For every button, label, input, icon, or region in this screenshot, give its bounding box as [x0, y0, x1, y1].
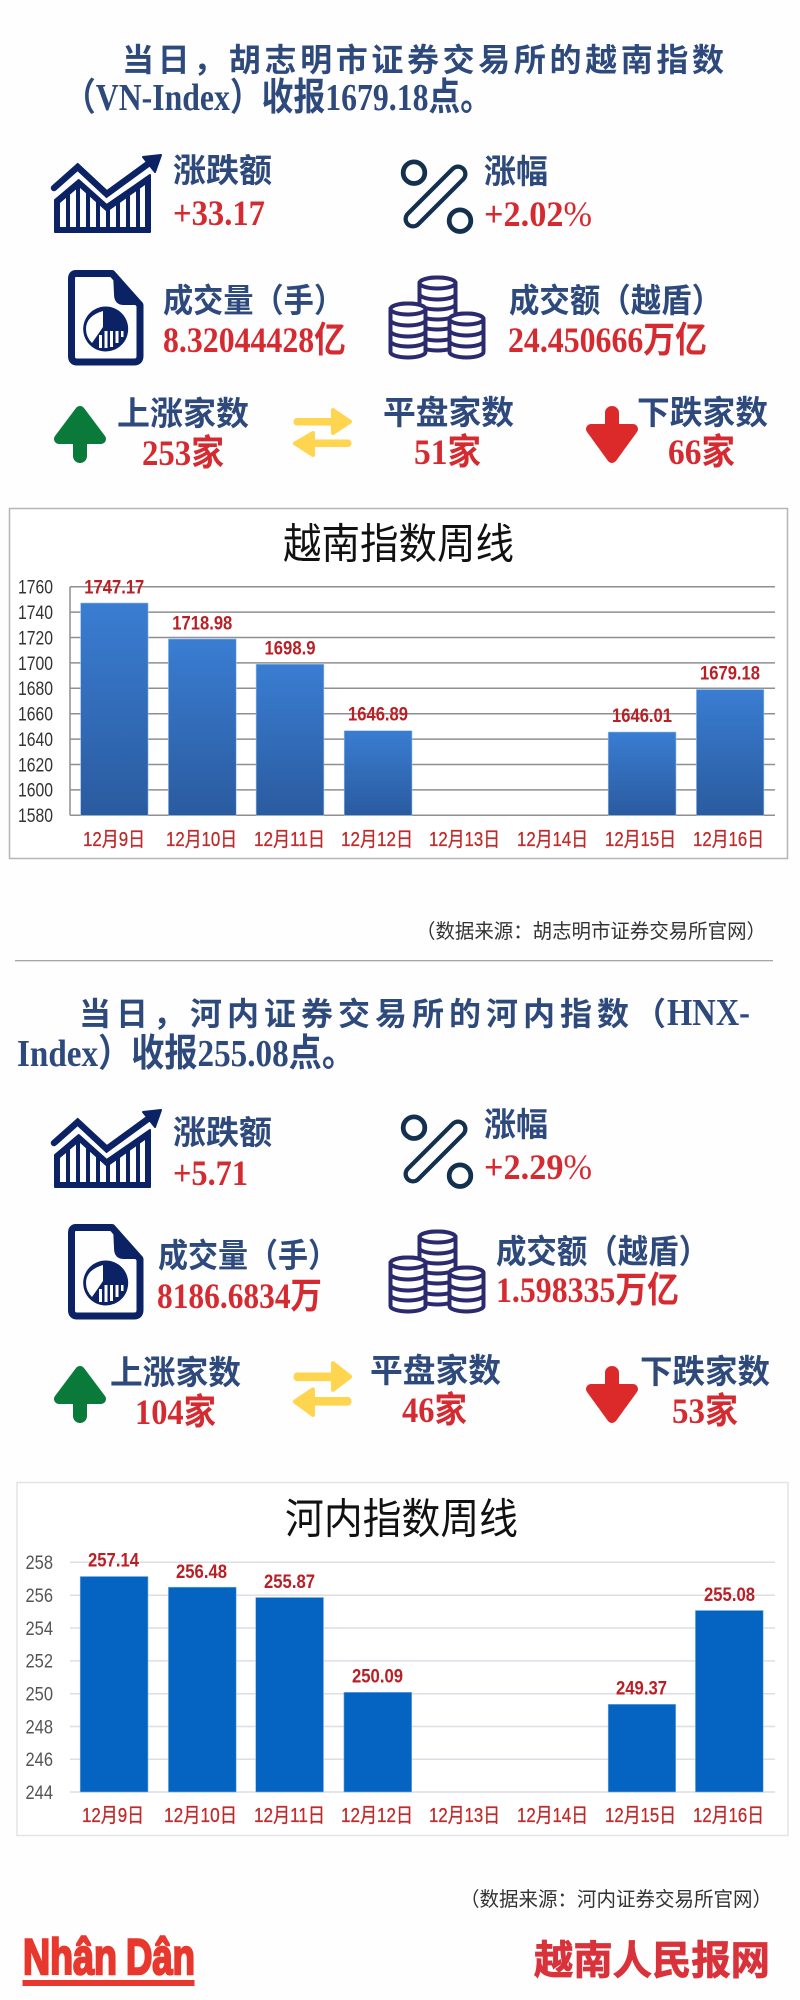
- icon: coins: [390, 1232, 484, 1312]
- y axis labels: 254: [26, 1619, 53, 1640]
- y axis labels: 250: [26, 1684, 53, 1706]
- x axis labels: 12月12日: [341, 1805, 413, 1827]
- stat: change amount: 涨跌额: [173, 1106, 272, 1154]
- x axis labels: 12月9日: [83, 829, 145, 851]
- heading: HNX-Index close: [17, 992, 750, 1075]
- y axis labels: 1760: [18, 578, 53, 598]
- y axis labels: 252: [26, 1652, 53, 1672]
- icon: coins: [390, 278, 484, 358]
- stat: volume: 8.32044428亿: [163, 320, 346, 360]
- stat: gainers: [110, 1346, 241, 1432]
- x axis labels: 12月11日: [254, 1805, 325, 1827]
- stat: gainers: 上涨家数: [117, 387, 249, 435]
- x axis labels: 12月14日: [517, 829, 588, 851]
- stat: losers: [637, 386, 768, 472]
- stat: change amount: [173, 1106, 272, 1193]
- logo: Nhan Dan: Dân: [126, 1929, 195, 1985]
- logo: Nhan Dan: Nhân: [23, 1929, 117, 1985]
- heading: VN-Index close: 当日，胡志明市证券交易所的越南指数: [122, 42, 724, 78]
- data labels: 255.87: [264, 1572, 315, 1593]
- stat: gainers: 104家: [135, 1392, 216, 1432]
- heading: VN-Index close: [64, 42, 724, 119]
- stat: change percent: 涨幅: [484, 1098, 548, 1146]
- stat: turnover: [496, 1225, 709, 1310]
- section: HNX-Index summary: [17, 992, 770, 1432]
- stat: change amount: +5.71: [173, 1153, 248, 1193]
- x axis labels: 12月14日: [517, 1805, 588, 1827]
- icon: swap arrows: [295, 410, 350, 455]
- stat: gainers: 253家: [142, 433, 224, 473]
- y axis labels: [18, 578, 53, 827]
- x axis labels: 12月11日: [254, 829, 325, 851]
- stat: losers: [640, 1345, 770, 1431]
- data labels: 255.08: [704, 1585, 755, 1606]
- heading: HNX-Index close: （: [634, 996, 666, 1032]
- stat: change percent: [484, 1098, 592, 1187]
- y axis labels: 1740: [18, 603, 53, 624]
- y axis labels: 256: [26, 1586, 53, 1607]
- stat: change amount: [173, 144, 272, 233]
- source note: VN-Index: （数据来源：胡志明市证券交易所官网）: [416, 920, 766, 943]
- stat: losers: 66家: [668, 432, 735, 472]
- data labels: 257.14: [88, 1550, 139, 1572]
- icon: rising chart: [54, 155, 161, 232]
- y axis labels: 1720: [18, 628, 53, 650]
- stat: volume: 8186.6834万: [157, 1276, 322, 1316]
- data labels: 1679.18: [700, 664, 760, 684]
- icon: up arrow: [59, 1371, 101, 1422]
- stat: losers: 53家: [672, 1391, 738, 1431]
- stat: change amount: +33.17: [173, 193, 265, 233]
- x axis labels: 12月16日: [693, 829, 764, 851]
- stat: turnover: 1.598335万亿: [496, 1270, 679, 1310]
- icon: rising chart: [54, 1110, 161, 1187]
- x axis labels: [82, 1805, 764, 1827]
- y axis labels: 1700: [18, 654, 53, 675]
- stat: unchanged: 平盘家数: [370, 1344, 501, 1392]
- stat: losers: 下跌家数: [640, 1345, 770, 1393]
- section: VN-Index summary: [54, 42, 768, 473]
- y axis labels: [26, 1553, 53, 1804]
- publisher name: 越南人民报网: [534, 1928, 770, 1986]
- data labels: 1646.01: [612, 706, 672, 727]
- source note: HNX-Index: （数据来源：河内证券交易所官网）: [460, 1888, 772, 1911]
- data labels: 250.09: [352, 1666, 403, 1688]
- stat: unchanged: 51家: [414, 432, 481, 472]
- stat: unchanged: [370, 1344, 501, 1430]
- panel: HNX-Index bar chart: [17, 1482, 788, 1836]
- chart title: 越南指数周线: [283, 510, 514, 572]
- y axis labels: 246: [26, 1750, 53, 1771]
- data labels: 249.37: [616, 1678, 667, 1700]
- x axis labels: 12月13日: [429, 829, 500, 851]
- heading: HNX-Index close: Index）收报255.08点。: [17, 1033, 355, 1075]
- stat: turnover: 成交额（越盾）: [496, 1225, 709, 1273]
- data labels: 1646.89: [348, 704, 408, 726]
- stat: turnover: 24.450666万亿: [508, 320, 707, 360]
- icon: document: [72, 1226, 142, 1316]
- y axis labels: 248: [26, 1718, 53, 1738]
- bars: [81, 603, 764, 815]
- icon: down arrow: [591, 1367, 633, 1418]
- y axis labels: 1640: [18, 730, 53, 751]
- x axis labels: 12月12日: [341, 829, 413, 851]
- data labels: 1698.9: [264, 638, 316, 660]
- y axis labels: 1580: [18, 806, 53, 827]
- data labels: [88, 1550, 755, 1700]
- heading: VN-Index close: （VN-Index）收报1679.18点。: [64, 77, 492, 119]
- x axis labels: 12月13日: [429, 1805, 500, 1827]
- stat: volume: [163, 274, 346, 360]
- stat: change percent: +2.02%: [484, 194, 592, 234]
- data labels: 256.48: [176, 1562, 227, 1583]
- stat: gainers: [117, 387, 249, 473]
- stat: change amount: 涨跌额: [173, 144, 272, 192]
- icon: up arrow: [59, 411, 101, 462]
- icon: percent: [403, 162, 471, 232]
- stat: unchanged: [383, 386, 514, 472]
- chart title: 河内指数周线: [285, 1486, 518, 1546]
- data labels: [84, 578, 760, 727]
- heading: HNX-Index close: HNX-: [667, 992, 750, 1034]
- stat: change percent: +2.29%: [484, 1147, 592, 1187]
- x axis labels: 12月15日: [605, 1805, 676, 1827]
- y axis labels: 1620: [18, 756, 53, 776]
- x axis labels: 12月16日: [693, 1805, 764, 1827]
- stat: volume: 成交量（手）: [158, 1229, 338, 1277]
- x axis labels: [83, 829, 764, 851]
- y axis labels: 1680: [18, 679, 53, 700]
- y axis labels: 244: [26, 1783, 53, 1804]
- icon: document: [72, 272, 142, 362]
- panel: VN-Index bar chart: [10, 508, 788, 858]
- stat: volume: [157, 1229, 338, 1316]
- y axis labels: 258: [26, 1553, 53, 1574]
- stat: volume: 成交量（手）: [163, 274, 344, 322]
- stat: turnover: [508, 274, 722, 360]
- stat: unchanged: 平盘家数: [383, 386, 514, 434]
- heading: HNX-Index close: 当日，河内证券交易所的河内指数: [79, 996, 629, 1032]
- y axis labels: 1600: [18, 780, 53, 802]
- stat: unchanged: 46家: [402, 1390, 467, 1430]
- data labels: 1718.98: [172, 614, 232, 634]
- data labels: 1747.17: [84, 578, 144, 598]
- x axis labels: 12月10日: [164, 1805, 237, 1827]
- x axis labels: 12月9日: [82, 1805, 144, 1827]
- icon: percent: [403, 1117, 471, 1186]
- stat: gainers: 上涨家数: [110, 1346, 241, 1394]
- icon: swap arrows: [295, 1363, 350, 1415]
- x axis labels: 12月15日: [605, 829, 676, 851]
- x axis labels: 12月10日: [166, 829, 237, 851]
- y axis labels: 1660: [18, 704, 53, 726]
- stat: losers: 下跌家数: [637, 386, 768, 434]
- stat: change percent: [484, 145, 592, 234]
- icon: down arrow: [591, 407, 633, 458]
- stat: turnover: 成交额（越盾）: [509, 274, 722, 322]
- bars: [80, 1576, 763, 1792]
- stat: change percent: 涨幅: [484, 145, 548, 193]
